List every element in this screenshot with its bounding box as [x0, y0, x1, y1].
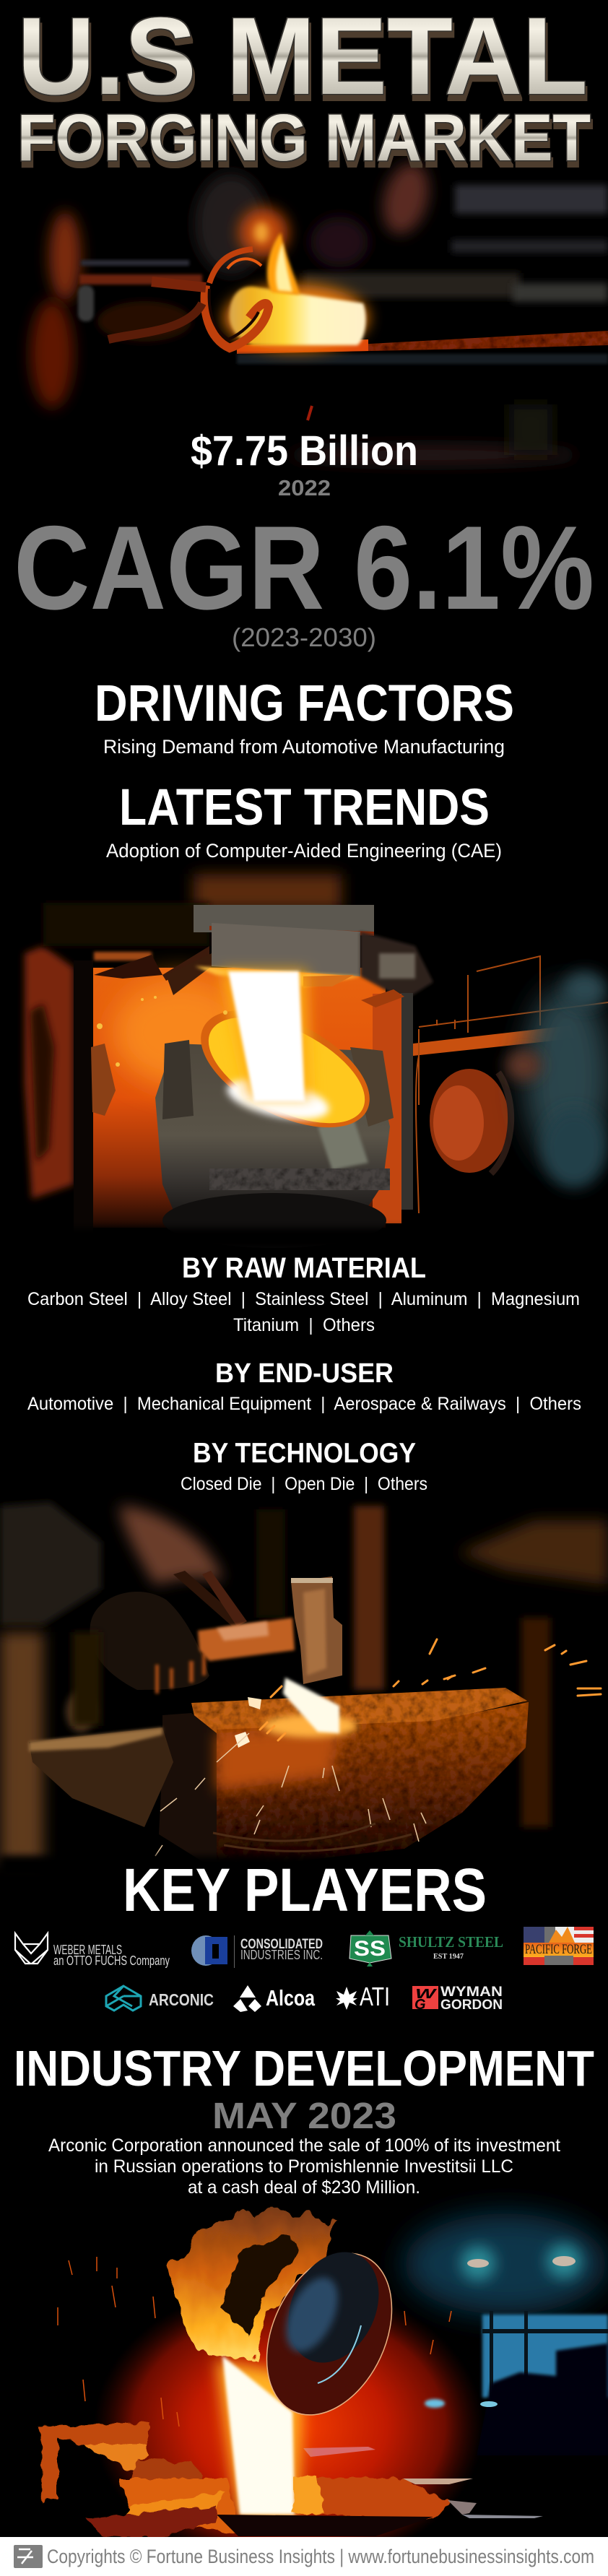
furnace photo: ladle pouring molten steel — [0, 874, 608, 1249]
logo: Alcoa: Alcoa — [266, 1985, 316, 2011]
logo: Consolidated Industries — [191, 1935, 323, 1968]
logo: ATI: ATI — [360, 1982, 390, 2011]
anvil photo: hammer striking hot metal — [0, 1502, 608, 1878]
development description — [48, 2135, 560, 2198]
development date: MAY 2023 — [212, 2095, 396, 2136]
logo: Arconic — [106, 1986, 214, 2011]
market size value: $7.75 Billion — [191, 428, 418, 474]
list line 2: Titanium | Others — [233, 1315, 375, 1335]
heading: driving factors: DRIVING FACTORS — [95, 675, 514, 732]
list line 1: Carbon Steel | Alloy Steel | Stainless Steel | Aluminum | Magnesium — [27, 1289, 580, 1309]
latest trends text: Adoption of Computer-Aided Engineering (CAE) — [106, 840, 502, 862]
heading: BY TECHNOLOGY — [193, 1438, 416, 1469]
heading: BY RAW MATERIAL — [182, 1252, 426, 1284]
logo: Wyman Gordon: G — [414, 1997, 426, 2013]
development description: Arconic Corporation announced the sale of 100% of its investment — [48, 2135, 560, 2156]
logo: Weber Metals: WEBER METALS — [53, 1943, 122, 1957]
logo: Arconic: ARCONIC — [149, 1990, 214, 2009]
foundry photo: molten metal pour — [39, 2209, 608, 2571]
logo: Weber Metals — [15, 1933, 170, 1968]
segment: by raw material — [27, 1252, 580, 1335]
logo: Shultz Steel: EST 1947 — [433, 1952, 464, 1961]
heading: BY END-USER — [215, 1358, 394, 1389]
logo: Weber Metals: an OTTO FUCHS Company — [53, 1953, 170, 1968]
logo: Wyman Gordon: WYMAN — [440, 1985, 503, 2000]
logo: Wyman Gordon: W — [415, 1987, 438, 2001]
logo: Consolidated Industries: CONSOLIDATED — [240, 1937, 323, 1952]
heading: key players: KEY PLAYERS — [123, 1856, 487, 1924]
logo: Shultz Steel — [349, 1930, 503, 1966]
footer bar — [0, 2537, 608, 2576]
logo: Consolidated Industries: INDUSTRIES INC. — [240, 1948, 323, 1962]
development description: in Russian operations to Promishlennie Investitsii LLC — [95, 2156, 513, 2177]
list: Automotive | Mechanical Equipment | Aerospace & Railways | Others — [27, 1394, 581, 1414]
logo: Wyman Gordon — [412, 1985, 503, 2013]
logo: Shultz Steel: SHULTZ STEEL — [399, 1933, 503, 1951]
segment: by end-user — [27, 1358, 581, 1414]
title — [17, 0, 591, 175]
market size year: 2022 — [278, 475, 331, 500]
development description: at a cash deal of $230 Million. — [188, 2177, 420, 2198]
footer logo — [14, 2545, 43, 2568]
CAGR period: (2023-2030) — [232, 623, 376, 652]
driving factors text: Rising Demand from Automotive Manufacturing — [103, 736, 505, 758]
segment: by technology — [181, 1438, 427, 1494]
list: Closed Die | Open Die | Others — [181, 1474, 427, 1494]
logo: ATI — [336, 1982, 390, 2011]
heading: latest trends: LATEST TRENDS — [119, 779, 490, 836]
logo: Alcoa — [233, 1985, 316, 2012]
logo: Wyman Gordon: GORDON — [440, 1998, 503, 2013]
logo: Pacific Forge — [524, 1927, 594, 1965]
hero photo: hot metal on anvil — [30, 158, 608, 465]
logo: Shultz Steel: SS — [354, 1937, 386, 1961]
